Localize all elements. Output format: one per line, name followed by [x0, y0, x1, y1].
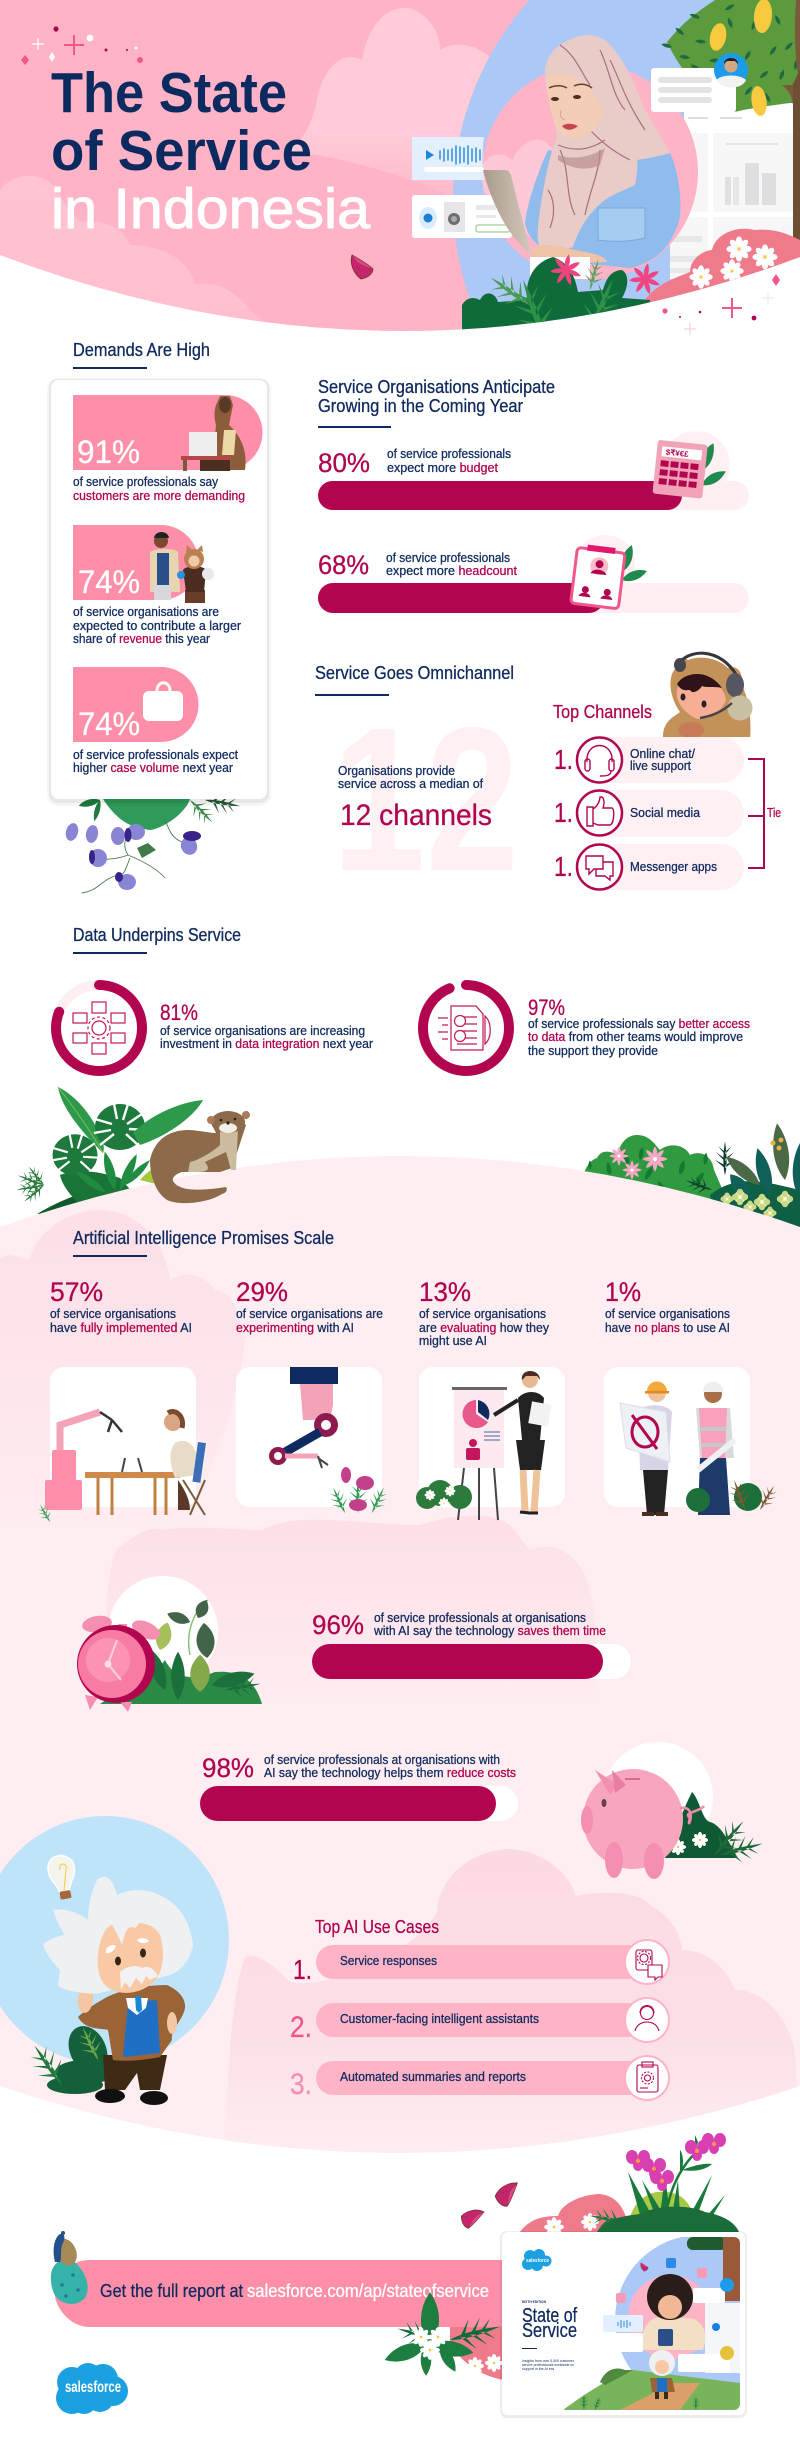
icon: headset	[585, 746, 614, 776]
butterflies	[459, 2182, 521, 2231]
stat: 98% reduce costs: of service professionals at organisations with	[264, 1752, 500, 1767]
channel: online chat: live support	[630, 758, 691, 773]
stat 74% case volume	[73, 667, 238, 775]
pink bush	[520, 2194, 630, 2232]
bar chart	[200, 1786, 518, 1821]
stat column: 29%: 29%	[236, 1277, 288, 1307]
stat 74% revenue: 74%	[78, 564, 140, 600]
cta banner: salesforce.com/ap/stateofservice	[247, 2281, 489, 2301]
cover logo: salesforce	[526, 2258, 549, 2264]
pink inner circle	[482, 64, 698, 280]
section heading: service goes omnichannel: Service Goes Omnichannel	[315, 663, 514, 683]
use case 3: 3.	[290, 2068, 312, 2101]
chat card	[651, 68, 736, 112]
stat: 68% headcount: 68%	[318, 550, 369, 580]
section clouds	[0, 1210, 800, 2160]
icon: clipboard	[571, 543, 648, 609]
channel: messenger apps: Messenger apps	[630, 859, 717, 874]
peacock	[51, 2231, 88, 2304]
stat: 81% data integration	[160, 1000, 374, 1051]
stat: 68% headcount: expect more headcount	[386, 563, 517, 578]
cover artwork	[564, 2237, 740, 2410]
stat: 81% data integration: of service organisations are increasing	[160, 1023, 365, 1038]
small inner cloud	[482, 140, 552, 246]
omnichannel text	[338, 763, 492, 832]
stat: 96% saves time: of service professionals at organisations	[374, 1610, 586, 1625]
otter	[150, 1111, 250, 1203]
plants	[100, 1598, 262, 1704]
stat column: 13%: are evaluating how they	[419, 1320, 549, 1335]
stat: 80% budget	[318, 431, 749, 510]
cta banner: Get the full report at	[100, 2281, 243, 2301]
stat column: 29%: experimenting with AI	[236, 1320, 354, 1335]
panel: construction workers	[604, 1367, 781, 1516]
use case 3	[290, 2056, 669, 2101]
tree trunk and mangoes	[707, 0, 800, 240]
top ai use cases heading: Top AI Use Cases	[315, 1917, 439, 1937]
cover text: service professionals worldwide on	[522, 2362, 574, 2367]
blue circle	[453, 0, 800, 328]
stat: 96% saves time	[312, 1610, 631, 1679]
icon: astro mascot with headset	[663, 653, 752, 740]
stat 74% case volume: higher case volume next year	[73, 760, 234, 775]
right tropical plants	[580, 1122, 800, 1240]
icon: lightbulb	[48, 1855, 74, 1900]
top channels heading: Top Channels	[553, 702, 652, 722]
icon: settings chat	[636, 1950, 662, 1980]
tropical plant	[462, 254, 660, 330]
stat column: 57%: 57%	[50, 1277, 103, 1307]
stat column: 57%	[50, 1277, 192, 1335]
use case 1: Service responses	[340, 1953, 437, 1968]
omnichannel text: Organisations provide	[338, 763, 455, 778]
panel: presenter	[416, 1367, 565, 1520]
stat: 68% headcount: of service professionals	[386, 550, 510, 565]
stat column: 29%: of service organisations are	[236, 1306, 383, 1321]
channel: messenger apps: 1.	[554, 851, 573, 882]
report cover	[500, 2231, 747, 2418]
channel: online chat: Online chat/	[630, 746, 695, 761]
omnichannel text: service across a median of	[338, 776, 483, 791]
stat: 96% saves time: with AI say the technology saves them time	[373, 1623, 606, 1638]
stat: 68% headcount	[318, 535, 749, 613]
sparkles bottom right	[662, 274, 780, 335]
einstein	[43, 1877, 193, 2105]
use case 2: 2.	[290, 2011, 312, 2044]
butterfly	[351, 255, 373, 279]
cover text: Insights from over 5,500 customer	[522, 2358, 575, 2363]
stat: 98% reduce costs: 98%	[202, 1753, 254, 1783]
cover text: support in the AI era	[522, 2366, 555, 2371]
tie bracket: Tie	[767, 805, 781, 820]
stat: 81% data integration: 81%	[160, 1000, 198, 1025]
stat column: 1%: 1%	[605, 1277, 641, 1307]
stat column: 13%: 13%	[419, 1277, 471, 1307]
stat 91%: customers are more demanding	[73, 488, 245, 503]
use case 2	[290, 1998, 669, 2044]
stat: 80% budget: of service professionals	[387, 446, 511, 461]
stat: 80% budget: expect more budget	[387, 460, 498, 475]
plants	[665, 1792, 766, 1868]
stat column: 29%	[236, 1277, 383, 1335]
tie bracket	[748, 759, 781, 868]
title: in Indonesia	[51, 177, 370, 241]
panel: person with robot arm	[35, 1367, 206, 1525]
bar chart: budget	[318, 481, 749, 510]
stat: 98% reduce costs: AI say the technology helps them reduce costs	[264, 1765, 516, 1780]
channel: online chat	[554, 737, 744, 783]
stat 91%: 91%	[77, 434, 140, 470]
stat 74% revenue	[73, 525, 242, 646]
icon: man and mascot	[150, 532, 214, 603]
header clouds	[0, 8, 492, 340]
section heading: data underpins service: Data Underpins Service	[73, 925, 241, 945]
channel: social media: 1.	[554, 797, 573, 828]
green bush	[597, 2207, 739, 2232]
icon: chat bubbles	[586, 856, 613, 880]
stat column: 1%	[605, 1277, 730, 1335]
icon: llama at desk	[181, 396, 246, 471]
audio card	[412, 137, 484, 180]
stat column: 57%: of service organisations	[50, 1306, 176, 1321]
stat 74% revenue: of service organisations are	[73, 604, 219, 619]
illustration: robot arm with flowers	[269, 1367, 391, 1517]
channel: online chat: 1.	[554, 744, 573, 775]
illustration: woman presenting with flip chart	[416, 1371, 552, 1520]
grass blades	[588, 2172, 725, 2233]
vine with purple flowers	[64, 789, 242, 893]
cover logo	[522, 2249, 552, 2271]
use case 2: Customer-facing intelligent assistants	[340, 2011, 539, 2026]
omnichannel text: 12 channels	[340, 799, 492, 832]
icon: thumbs up	[587, 797, 614, 826]
icon: calculator	[652, 440, 728, 499]
stat 91%: of service professionals say	[73, 474, 218, 489]
section heading: demands are high: Demands Are High	[73, 340, 210, 360]
section heading: demands are high	[73, 340, 210, 369]
stat: 97% better access: to data from other teams would improve	[528, 1029, 743, 1044]
avatar	[714, 53, 748, 88]
use case 3: Automated summaries and reports	[340, 2069, 526, 2084]
section heading: service organisations anticipate	[318, 377, 555, 428]
use case 1: 1.	[293, 1954, 312, 1985]
section heading: service organisations anticipate: Growing in the Coming Year	[318, 396, 523, 416]
bar chart: headcount	[318, 583, 749, 613]
woman	[483, 35, 681, 279]
stat column: 1%: of service organisations	[605, 1306, 730, 1321]
section heading: artificial intelligence: Artificial Intelligence Promises Scale	[73, 1228, 334, 1248]
einstein mascot with lightbulb	[0, 1816, 229, 2105]
channel: messenger apps	[554, 844, 744, 890]
dashboard panel	[670, 103, 800, 279]
tree foliage	[661, 0, 800, 112]
stat: 96% saves time: 96%	[312, 1610, 364, 1640]
cover text	[522, 2300, 577, 2371]
bar chart	[312, 1644, 631, 1679]
stat 74% revenue: expected to contribute a larger	[73, 618, 242, 633]
orchid flowers	[626, 2133, 726, 2191]
piggy bank with plants	[581, 1742, 766, 1879]
salesforce logo	[56, 2363, 128, 2414]
clock	[77, 1614, 163, 1712]
icon: clipboard gear	[637, 2062, 658, 2092]
stat: 97% better access: of service professionals say better access	[528, 1016, 750, 1031]
icon: calculator: $₹¥€£	[665, 448, 690, 459]
panel: demands card	[47, 378, 271, 806]
product card	[412, 195, 512, 238]
cover butterfly	[641, 2263, 648, 2271]
channel: social media	[554, 790, 744, 837]
hero header panel	[0, 0, 800, 335]
stat: 80% budget: 80%	[318, 448, 370, 478]
icon: data report	[438, 1006, 490, 1050]
stat column: 1%: have no plans to use AI	[605, 1320, 730, 1335]
orchid plant	[520, 2133, 739, 2237]
stat: 97% better access: 97%	[528, 995, 565, 1020]
illustration: robot arm and worker	[35, 1411, 206, 1525]
illustration: engineers with blueprint	[620, 1382, 781, 1516]
stat column: 13%: of service organisations	[419, 1306, 546, 1321]
stat: 97% better access: the support they provide	[528, 1043, 658, 1058]
stat column: 13%	[419, 1277, 549, 1348]
header pink ground	[0, 0, 800, 331]
stat column: 57%: have fully implemented AI	[50, 1320, 192, 1335]
title	[51, 61, 370, 241]
icon: bag	[143, 683, 183, 721]
cover text: SIXTH EDITION	[522, 2300, 546, 2304]
big 12 watermark: 12	[332, 685, 519, 914]
use case 1	[293, 1940, 669, 1985]
stat: 98% reduce costs	[200, 1752, 518, 1821]
icon: data integration	[73, 1002, 125, 1054]
donut chart: 81%	[56, 985, 142, 1071]
stat column: 13%: might use AI	[419, 1333, 487, 1348]
card background	[47, 378, 271, 806]
orchid stem	[668, 2148, 700, 2205]
pink bush with flowers	[645, 228, 800, 304]
salesforce logo: salesforce	[65, 2379, 121, 2396]
pink section background	[0, 1156, 800, 2153]
cta banner	[55, 2260, 505, 2327]
banner plant	[382, 2292, 504, 2380]
yellow green shrub	[630, 2192, 693, 2217]
channel: social media: Social media	[630, 805, 701, 820]
section heading: service organisations anticipate: Service Organisations Anticipate	[318, 377, 555, 397]
cover text: State of	[522, 2305, 577, 2327]
title: The State	[51, 61, 287, 125]
alarm clock with plants	[77, 1576, 262, 1712]
title: of Service	[51, 119, 312, 183]
donut chart: 97%	[423, 985, 509, 1071]
stat: 81% data integration: investment in data integration next year	[160, 1036, 374, 1051]
cover text: Service	[522, 2320, 577, 2342]
panel: robot arm	[236, 1367, 391, 1517]
stat 74% case volume: 74%	[78, 706, 140, 742]
icon: assistant	[635, 2006, 659, 2031]
left tropical plants	[15, 1087, 203, 1214]
stat 74% revenue: share of revenue this year	[73, 631, 211, 646]
pig	[581, 1769, 704, 1879]
sparkles top left	[21, 26, 143, 65]
stat 91%	[73, 395, 262, 503]
stat 74% case volume: of service professionals expect	[73, 747, 238, 762]
plants	[23, 2020, 115, 2094]
stat: 97% better access	[528, 995, 750, 1058]
